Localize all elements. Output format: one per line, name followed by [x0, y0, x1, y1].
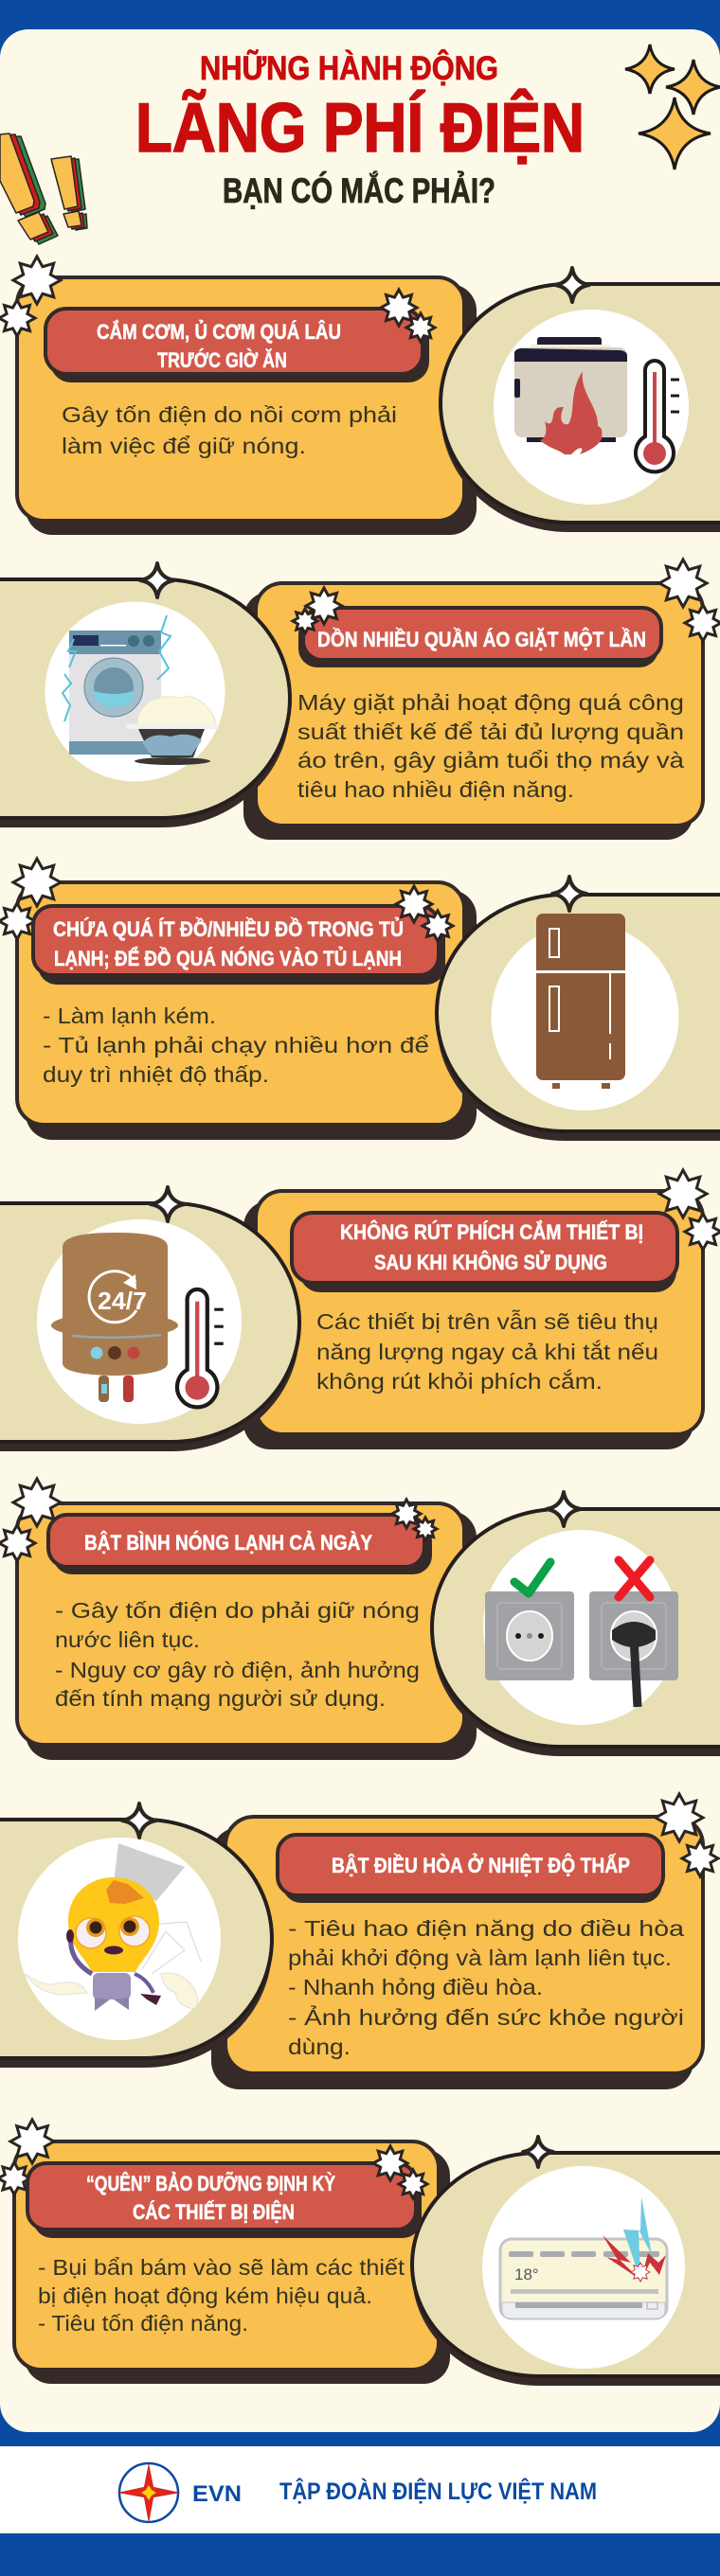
body text: bị điện hoạt động kém hiệu quả.	[38, 2283, 372, 2308]
heading bar: LẠNH; ĐỂ ĐỒ QUÁ NÓNG VÀO TỦ LẠNH	[54, 947, 402, 970]
icon: rice cooker	[514, 337, 627, 454]
heading bar: KHÔNG RÚT PHÍCH CẮM THIẾT BỊ	[340, 1220, 643, 1244]
body text	[316, 1309, 658, 1394]
body text: áo trên, gây giảm tuổi thọ máy và	[297, 748, 684, 773]
panel: card 6 broken bulb	[0, 1794, 718, 2089]
star decorations	[659, 1170, 720, 1250]
heading bar	[278, 1835, 663, 1903]
title line 2: LÃNG PHÍ ĐIỆN	[135, 90, 585, 167]
icon: sockets with check and cross	[485, 1560, 678, 1707]
panel: card 5 sockets	[0, 1479, 720, 1760]
body text: - Nhanh hỏng điều hòa.	[288, 1975, 543, 1999]
icon: washing machine	[63, 615, 219, 765]
heading bar	[33, 906, 445, 985]
body text: - Bụi bẩn bám vào sẽ làm các thiết	[38, 2255, 405, 2280]
icon: water heater: 24/7	[98, 1287, 147, 1315]
body text: làm việc để giữ nóng.	[62, 434, 306, 458]
organization name: TẬP ĐOÀN ĐIỆN LỰC VIỆT NAM	[279, 2477, 597, 2505]
body text	[62, 402, 397, 458]
icon: air conditioner: 18°	[514, 2265, 539, 2283]
body text: không rút khỏi phích cắm.	[316, 1369, 603, 1394]
body text: - Tủ lạnh phải chạy nhiều hơn để	[43, 1033, 429, 1057]
footer	[0, 2446, 720, 2533]
panel: card 4 water heater	[0, 1170, 720, 1451]
heading bar: CẮM CƠM, Ủ CƠM QUÁ LÂU	[97, 320, 341, 344]
star decorations	[0, 2120, 54, 2194]
heading bar: CHỨA QUÁ ÍT ĐỒ/NHIỀU ĐỒ TRONG TỦ	[53, 917, 404, 941]
body text: đến tính mạng người sử dụng.	[55, 1686, 386, 1711]
body text: tiêu hao nhiều điện năng.	[297, 777, 574, 802]
panel: card 1 rice cooker	[0, 257, 720, 535]
body text: suất thiết kế để tải đủ lượng quần	[297, 720, 684, 744]
heading bar: SAU KHI KHÔNG SỬ DỤNG	[374, 1251, 607, 1274]
icon: sparkles	[625, 44, 720, 169]
icon: exclamation marks	[0, 133, 87, 244]
heading bar	[45, 309, 429, 382]
bar stars	[392, 1500, 437, 1540]
heading bar	[27, 2163, 422, 2238]
body text: phải khởi động và làm lạnh liên tục.	[288, 1945, 672, 1970]
body text: - Nguy cơ gây rò điện, ảnh hưởng	[55, 1658, 420, 1682]
bar stars	[381, 290, 435, 342]
heading bar: “QUÊN” BẢO DƯỠNG ĐỊNH KỲ	[86, 2172, 335, 2195]
star decorations	[293, 560, 720, 641]
heading bar	[48, 1515, 432, 1574]
panel: card 2 washing machine	[0, 560, 720, 840]
icon: broken bulb	[25, 1843, 201, 2011]
title line 1: NHỮNG HÀNH ĐỘNG	[200, 49, 498, 87]
icon: EVN logo	[117, 2463, 180, 2523]
star decorations	[0, 859, 61, 939]
body text	[297, 690, 684, 802]
heading bar: DỒN NHIỀU QUẦN ÁO GIẶT MỘT LẦN	[317, 628, 646, 651]
title line 3: BẠN CÓ MẮC PHẢI?	[223, 170, 495, 210]
body text: Máy giặt phải hoạt động quá công	[297, 690, 684, 715]
heading bar: BẬT BÌNH NÓNG LẠNH CẢ NGÀY	[84, 1531, 372, 1554]
logo wordmark: EVN	[192, 2481, 242, 2507]
icon: air conditioner	[500, 2196, 667, 2318]
panel: card 3 fridge	[0, 859, 720, 1141]
heading bar: TRƯỚC GIỜ ĂN	[157, 348, 287, 372]
star decorations	[0, 257, 61, 336]
bar stars	[373, 2146, 427, 2198]
body text: duy trì nhiệt độ thấp.	[43, 1062, 269, 1087]
icon: fridge	[536, 914, 625, 1089]
body text: - Tiêu tốn điện năng.	[38, 2311, 248, 2336]
star decorations	[656, 1794, 718, 1876]
body text: - Tiêu hao điện năng do điều hòa	[288, 1916, 684, 1941]
heading bar: BẬT ĐIỀU HÒA Ở NHIỆT ĐỘ THẤP	[332, 1854, 630, 1877]
heading bar	[292, 1213, 677, 1292]
body text	[55, 1598, 420, 1711]
body text: - Gây tốn điện do phải giữ nóng	[55, 1598, 420, 1623]
body text: - Làm lạnh kém.	[43, 1004, 216, 1028]
body text	[288, 1916, 684, 2059]
body text: nước liên tục.	[55, 1627, 200, 1652]
icon: water heater	[51, 1233, 178, 1402]
header	[0, 44, 720, 244]
body text: - Ảnh hưởng đến sức khỏe người	[288, 2003, 684, 2030]
body text: Gây tốn điện do nồi cơm phải	[62, 402, 397, 427]
heading bar: CÁC THIẾT BỊ ĐIỆN	[133, 2200, 295, 2224]
body text: dùng.	[288, 2034, 351, 2059]
bar stars	[396, 886, 453, 941]
panel: card 7 air conditioner	[0, 2120, 720, 2386]
body text	[43, 1004, 429, 1087]
body text	[38, 2255, 405, 2336]
body text: Các thiết bị trên vẫn sẽ tiêu thụ	[316, 1309, 658, 1334]
icon: thermometer	[636, 361, 679, 471]
icon: thermometer	[177, 1289, 224, 1407]
body text: năng lượng ngay cả khi tắt nếu	[316, 1340, 658, 1364]
heading bar	[298, 608, 661, 667]
star decorations	[0, 1479, 61, 1561]
